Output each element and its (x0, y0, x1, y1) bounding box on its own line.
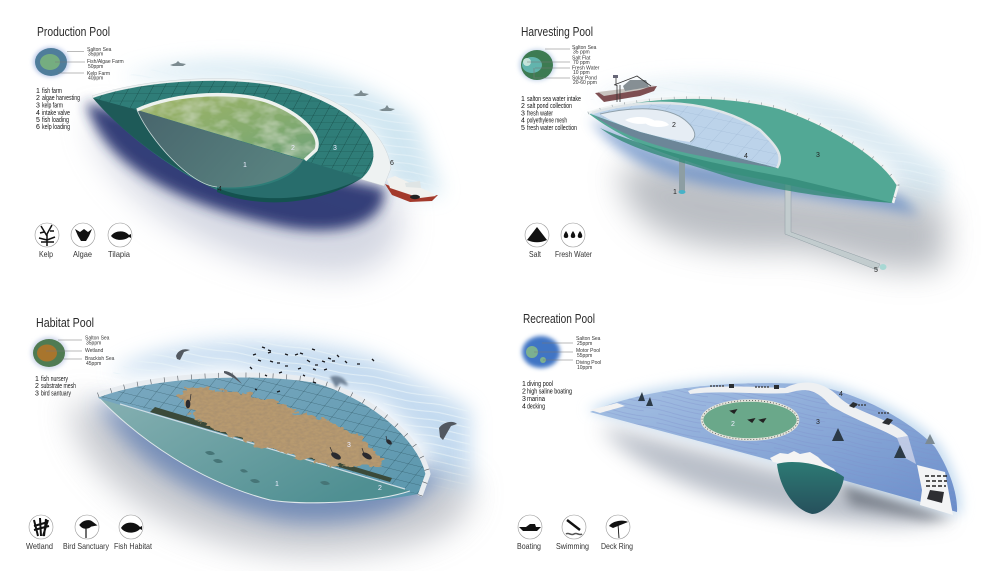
numbered list: 4 (522, 404, 526, 410)
pool numbers: 6 (390, 160, 394, 167)
icon row: Deck Ring (601, 541, 633, 551)
sea background (120, 62, 442, 195)
motor pool (702, 400, 798, 440)
numbered list: kelp loading (42, 124, 70, 131)
salinity diagram: Salt Flat (572, 56, 591, 62)
salinity diagram (522, 336, 601, 371)
icon row: Tilapia (108, 249, 130, 259)
pool numbers: 2 (672, 122, 676, 129)
icon row (525, 223, 592, 259)
numbered list: 2 (522, 388, 526, 396)
numbered list: 3 (522, 396, 526, 403)
pool numbers: 4 (839, 391, 843, 398)
reed wetland (178, 388, 382, 467)
harvesting pool basin (588, 98, 898, 203)
sea background (590, 81, 945, 205)
salinity diagram (33, 47, 124, 82)
underwater shadow (590, 118, 945, 270)
salinity diagram: Salton Sea (576, 336, 601, 342)
numbered list: diving pool (527, 381, 553, 388)
numbered list: fish nursery (41, 376, 68, 383)
numbered list: 3 (36, 102, 40, 110)
title: production pool: Production Pool (37, 24, 110, 39)
title: habitat pool: Habitat Pool (36, 315, 94, 330)
icon row: Salt (529, 249, 542, 259)
salinity diagram: 40ppm (88, 76, 103, 82)
numbered list: 5 (36, 117, 40, 124)
pool numbers (672, 122, 878, 274)
title: harvesting pool: Harvesting Pool (521, 24, 593, 39)
numbered list: fresh water collection (527, 125, 577, 132)
pool numbers: 2 (291, 145, 295, 152)
numbered list: salt pond collection (527, 103, 572, 110)
large birds (176, 349, 457, 440)
bird flock (250, 347, 374, 392)
numbered list: salton sea water intake (527, 96, 581, 103)
decking path (590, 383, 953, 515)
pool numbers: 2 (378, 485, 382, 492)
icon row: Wetland (26, 541, 53, 551)
numbered list (521, 96, 581, 132)
numbered list: marina (527, 396, 545, 403)
numbered list: 4 (36, 110, 40, 117)
numbered list: 3 (35, 390, 39, 398)
numbered list: 2 (36, 95, 40, 102)
title: recreation pool: Recreation Pool (523, 311, 595, 326)
salinity diagram: 10 ppm (573, 70, 590, 76)
fish shadows and roots (205, 451, 330, 485)
pool numbers (218, 145, 394, 193)
pool numbers: 1 (243, 162, 247, 169)
salinity diagram: Kelp Farm (87, 71, 110, 77)
numbered list: fish farm (42, 88, 62, 95)
small boats (170, 61, 395, 111)
numbered list: 1 (522, 381, 526, 388)
numbered list: polyethylene mesh (527, 118, 567, 124)
numbered list: 2 (35, 383, 39, 390)
pool numbers (731, 391, 843, 428)
sailboats (638, 392, 906, 458)
pool numbers: 3 (333, 145, 337, 152)
numbered list (522, 381, 572, 410)
salinity diagram: Wetland (85, 348, 103, 354)
production pool basin (93, 81, 373, 202)
icon row: Algae (73, 249, 92, 259)
underwater shadow (600, 425, 955, 525)
numbered list (35, 376, 76, 398)
numbered list: 4 (521, 118, 525, 124)
salinity diagram: 50ppm (88, 64, 103, 70)
pool numbers: 5 (874, 267, 878, 274)
diving pool bowl (770, 451, 844, 514)
blurred bird shadow (330, 376, 348, 388)
numbered list: 2 (521, 103, 525, 110)
numbered list: 1 (521, 96, 525, 103)
numbered list: algae harvesting (42, 95, 80, 102)
numbered list: 1 (35, 376, 39, 383)
numbered list (36, 88, 80, 131)
salinity diagram: 35 ppm (573, 50, 590, 56)
distant sailboat (925, 434, 935, 444)
pool numbers: 4 (218, 186, 222, 193)
icon row: Fish Habitat (114, 541, 153, 551)
salinity diagram: 25ppm (577, 341, 592, 347)
habitat pool basin (98, 377, 426, 503)
pool numbers: 3 (347, 442, 351, 449)
panel: recreation pool (517, 311, 961, 551)
salinity diagram: Fish/Algae Farm (87, 59, 124, 65)
pipes (678, 148, 886, 270)
numbered list: decking (527, 404, 545, 410)
numbered list: substrate mesh (41, 383, 76, 390)
salinity diagram (31, 336, 115, 369)
salinity diagram: 35ppm (86, 340, 101, 346)
numbered list: 1 (36, 88, 40, 95)
salinity diagram: Salton Sea (572, 45, 597, 51)
salinity diagram: 45ppm (86, 361, 101, 367)
pool numbers: 3 (816, 152, 820, 159)
pool numbers: 1 (673, 189, 677, 196)
numbered list: fish loading (42, 117, 69, 124)
icon row: Bird Sanctuary (63, 541, 110, 551)
salinity diagram: 55ppm (577, 353, 592, 359)
salinity diagram: 10ppm (577, 365, 592, 371)
underwater shadow (86, 102, 401, 275)
icon row: Kelp (39, 249, 53, 259)
pool numbers (275, 442, 382, 492)
panel: production pool (33, 24, 442, 275)
salinity diagram: Fresh Water (572, 66, 600, 72)
numbered list: fresh water (527, 110, 554, 118)
sea background (110, 341, 470, 490)
icon row: Fresh Water (555, 249, 592, 259)
boat: harvesting vessel (595, 75, 657, 102)
salinity diagram: Solar Pond (572, 76, 597, 82)
icon row (517, 515, 633, 551)
pool numbers: 3 (816, 419, 820, 426)
numbered list: 5 (521, 125, 525, 132)
salinity diagram (519, 45, 600, 86)
underwater shadow (70, 398, 471, 555)
boat: kelp loading (385, 176, 438, 202)
icon row: Swimming (556, 541, 589, 551)
panel: harvesting pool (519, 24, 945, 274)
salinity diagram: 35ppm (88, 52, 103, 58)
pool numbers: 2 (731, 421, 735, 428)
salinity diagram: 20-60 ppm (573, 80, 597, 86)
pool numbers: 1 (275, 481, 279, 488)
icon row (26, 515, 153, 551)
numbered list: intake valve (42, 110, 70, 117)
salinity diagram: Brackish Sea (85, 356, 115, 362)
sea plate (587, 379, 961, 515)
numbered list: 3 (521, 110, 525, 118)
deck ring (92, 79, 391, 186)
numbered list: bird santuary (41, 390, 71, 398)
salinity diagram: Diving Pool (576, 360, 601, 366)
deck ring (98, 375, 428, 496)
algae harvesting pond (137, 95, 317, 188)
numbered list: high saline boating (527, 388, 572, 396)
icon row: Boating (517, 541, 541, 551)
pool numbers: 4 (744, 153, 748, 160)
salinity diagram: Salton Sea (87, 47, 112, 53)
wading birds (186, 394, 392, 461)
salinity diagram: Salton Sea (85, 336, 110, 342)
numbered list: 6 (36, 124, 40, 131)
salinity diagram: 70 ppm (573, 60, 590, 66)
salinity diagram: Motor Pool (576, 348, 600, 354)
icon row (35, 223, 132, 259)
numbered list: kelp farm (42, 102, 63, 110)
panel: habitat pool (26, 315, 471, 555)
